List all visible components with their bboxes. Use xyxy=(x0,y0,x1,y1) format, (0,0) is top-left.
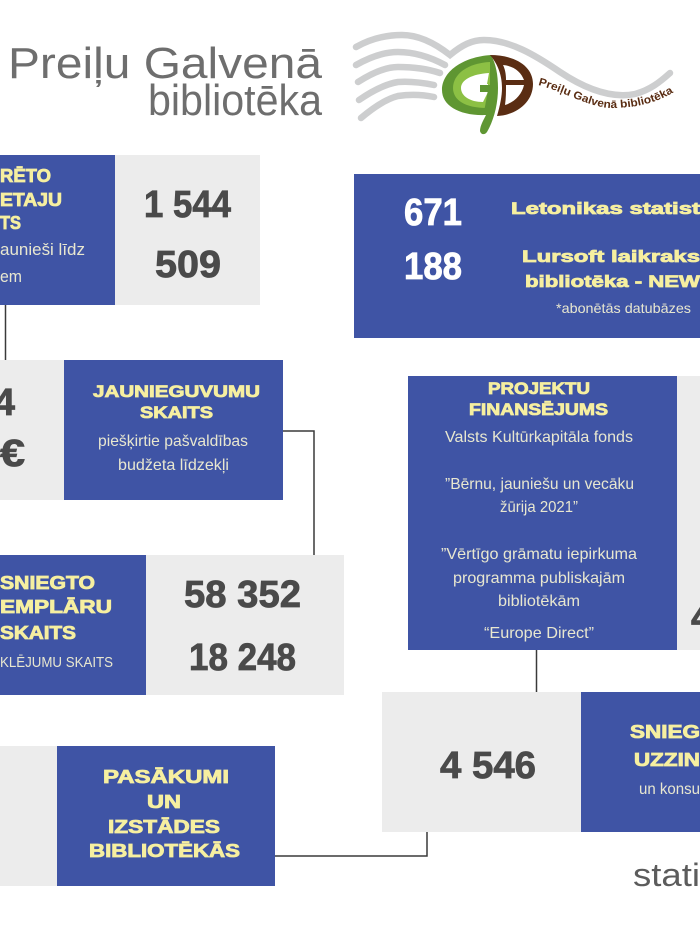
loans heading: EMPLĀRU xyxy=(0,597,112,617)
users values box xyxy=(115,155,260,305)
funding values box xyxy=(677,376,700,650)
panel: events and exhibitions xyxy=(0,746,275,886)
events heading: BIBLIOTĒKĀS xyxy=(89,841,240,861)
users label box xyxy=(0,155,115,305)
connector lines xyxy=(6,305,536,856)
acquisitions note: budžeta līdzekļi xyxy=(118,457,229,474)
acquisitions heading: JAUNIEGUVUMU xyxy=(93,383,260,401)
users numbers: 509 xyxy=(155,244,221,286)
events heading xyxy=(89,767,240,861)
funding sources list: Valsts Kultūrkapitāla fonds xyxy=(445,429,633,446)
title: bibliotēka xyxy=(148,76,322,125)
funding sources list: ”Bērnu, jauniešu un vecāku xyxy=(445,476,634,493)
databases names: Lursoft laikraks xyxy=(522,247,700,266)
panel: loans xyxy=(0,555,344,695)
users note xyxy=(0,240,85,286)
events heading: IZSTĀDES xyxy=(108,817,220,837)
databases note: *abonētās datubāzes xyxy=(556,300,691,316)
logo: brown shape xyxy=(490,55,533,116)
enquiries label box xyxy=(581,692,700,832)
users numbers xyxy=(144,184,231,286)
enquiries heading: UZZIN xyxy=(634,750,700,770)
databases names: Letonikas statist xyxy=(511,199,700,218)
loans numbers: 18 248 xyxy=(189,637,296,679)
panel: registered users xyxy=(0,155,260,305)
acquisitions values box xyxy=(0,360,64,500)
events heading: PASĀKUMI xyxy=(103,767,229,787)
loans heading: SKAITS xyxy=(0,623,76,643)
loans heading: SNIEGTO xyxy=(0,573,95,593)
panel: new acquisitions xyxy=(0,360,283,500)
users heading: ETAJU xyxy=(0,190,62,210)
funding sources list: programma publiskajām xyxy=(453,570,625,587)
logo: grey waves xyxy=(356,35,670,118)
funding sources list: ”Vērtīgo grāmatu iepirkuma xyxy=(441,546,637,563)
panel: subscribed databases xyxy=(354,174,700,338)
users numbers: 1 544 xyxy=(144,184,231,226)
funding heading: FINANSĒJUMS xyxy=(469,400,608,419)
acquisitions note: piešķirtie pašvaldības xyxy=(98,433,248,450)
panel: project funding xyxy=(408,376,700,650)
acquisitions note xyxy=(98,433,248,474)
funding sources list: “Europe Direct” xyxy=(484,625,594,642)
logo: curved caption xyxy=(538,85,674,108)
funding sources list: žūrija 2021” xyxy=(500,499,578,516)
databases numbers: 671 xyxy=(404,192,462,234)
databases names: bibliotēka - NEW xyxy=(525,272,700,291)
loans numbers xyxy=(184,574,301,679)
events label box xyxy=(57,746,275,886)
users note: em xyxy=(0,267,22,286)
enquiries number: 4 546 xyxy=(440,745,536,787)
enquiries values box xyxy=(382,692,581,832)
loans heading xyxy=(0,573,112,643)
events heading: UN xyxy=(147,792,181,812)
users heading: TS xyxy=(0,213,21,233)
enquiries heading: SNIEG xyxy=(630,722,700,742)
loans values box xyxy=(146,555,344,695)
footer label: stati xyxy=(633,857,700,893)
title xyxy=(8,39,323,125)
acquisitions label box xyxy=(64,360,283,500)
acquisitions heading xyxy=(93,383,260,422)
acquisitions numbers: € xyxy=(0,433,25,475)
funding heading: PROJEKTU xyxy=(488,380,590,398)
logo: Preiļu Galvenā bibliotēka xyxy=(538,78,674,108)
users heading: RĒTO xyxy=(0,166,51,186)
events values box xyxy=(0,746,57,886)
funding sources list: bibliotēkām xyxy=(498,593,580,610)
users heading xyxy=(0,166,62,233)
loans note: KLĒJUMU SKAITS xyxy=(0,654,113,671)
acquisitions numbers xyxy=(0,382,25,475)
funding label box xyxy=(408,376,677,650)
users note: aunieši līdz xyxy=(0,240,85,259)
loans label box xyxy=(0,555,146,695)
databases box xyxy=(354,174,700,338)
title: Preiļu Galvenā xyxy=(8,39,323,88)
logo xyxy=(352,32,674,134)
funding heading xyxy=(469,380,608,419)
databases numbers: 188 xyxy=(404,246,462,288)
acquisitions heading: SKAITS xyxy=(140,404,213,422)
databases names xyxy=(511,199,700,291)
loans numbers: 58 352 xyxy=(184,574,301,616)
logo: green leaf G xyxy=(442,55,498,134)
panel: information enquiries xyxy=(382,692,700,832)
funding sources list xyxy=(441,429,637,642)
databases numbers xyxy=(404,192,462,288)
enquiries heading xyxy=(630,722,700,770)
